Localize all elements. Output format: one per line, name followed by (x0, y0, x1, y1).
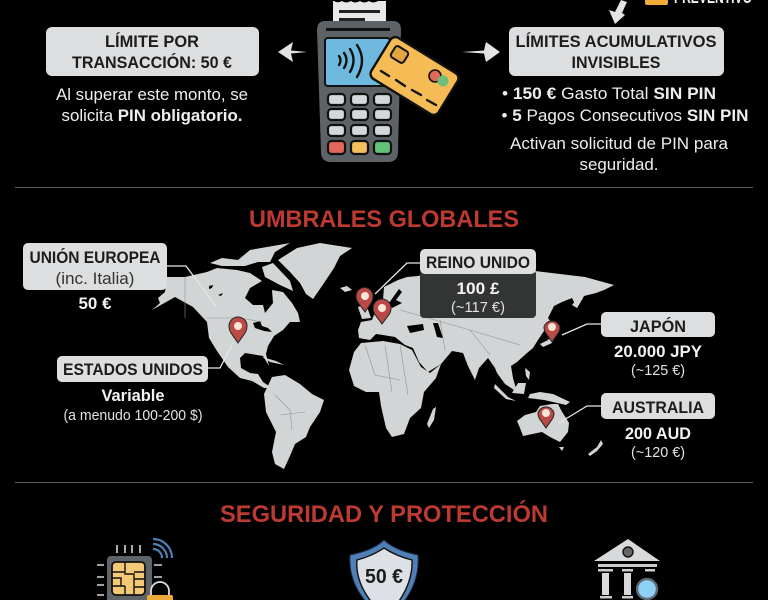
pin: Reino Unido (356, 288, 373, 312)
callout: Australia (601, 393, 715, 461)
callout: Australia: 200 AUD (625, 424, 691, 443)
callout: Reino Unido: 100 £ (456, 279, 500, 298)
panel: transaction limit: solicita PIN obligatorio. (62, 106, 242, 125)
icon: chip with contactless waves and padlock (97, 539, 173, 600)
connector: Estados Unidos (208, 343, 233, 368)
panel: transaction limit: TRANSACCIÓN: 50 € (72, 53, 233, 72)
land: Eurasia (358, 270, 614, 392)
callout: Estados Unidos (57, 356, 208, 424)
callout: Australia: (~120 €) (631, 444, 685, 461)
heading: global thresholds: UMBRALES GLOBALES (249, 206, 519, 233)
pin: Australia (538, 407, 554, 428)
land: Africa (349, 341, 441, 437)
panel: transaction limit: LÍMITE POR (105, 32, 199, 51)
icon: shield with 50 euro (350, 540, 418, 600)
connector: Reino Unido (375, 263, 420, 294)
callout: Estados Unidos: Variable (102, 386, 164, 405)
water: Great Lakes and northern lakes (209, 285, 272, 332)
connector: Unión Europea (167, 266, 216, 306)
panel: cumulative invisible limits: Activan solicitud de PIN para (510, 134, 729, 153)
callout: Reino Unido: (~117 €) (451, 299, 505, 316)
arrow: preventive tag to cumulative limits (609, 0, 627, 24)
land: South America (264, 375, 324, 469)
callout: Reino Unido: REINO UNIDO (426, 253, 530, 272)
pin: Japón (544, 321, 560, 342)
arrow: terminal to transaction limit (278, 42, 307, 62)
land: Great Britain (358, 304, 371, 319)
callout: Australia: AUSTRALIA (612, 398, 704, 417)
callout: Unión Europea: UNIÓN EUROPEA (30, 248, 160, 267)
land: Japan (540, 296, 583, 347)
land: Indonesia and Philippines (494, 368, 570, 405)
land: Cuba and Caribbean (262, 357, 284, 365)
land: Iceland (340, 286, 352, 292)
panel: cumulative invisible limits: • 5 Pagos Consecutivos SIN PIN (502, 106, 748, 125)
icon: payment terminal with card (317, 0, 461, 162)
land: North America (152, 268, 300, 388)
land: Australia (517, 404, 569, 451)
callout: Japón (601, 312, 715, 379)
callout: Japón: JAPÓN (630, 317, 686, 336)
panel: cumulative invisible limits: • 150 € Gasto Total SIN PIN (502, 84, 716, 103)
connector: Japón (562, 324, 601, 335)
water: Baltic, Black and Caspian seas (389, 289, 443, 338)
land: Arctic islands (210, 243, 293, 291)
connector: Australia (559, 406, 601, 423)
panel: cumulative invisible limits: seguridad. (580, 155, 658, 174)
callout: preventive tag, cut off at top (645, 0, 752, 7)
icon: shield with 50 euro: 50 € (365, 566, 403, 588)
land: Greenland (278, 243, 352, 299)
callout: Unión Europea: (inc. Italia) (56, 269, 134, 288)
land: New Zealand (588, 440, 603, 456)
callout: Japón: (~125 €) (631, 362, 685, 379)
arrow: terminal to cumulative limits (462, 42, 500, 62)
heading: security and protection: SEGURIDAD Y PROTECCIÓN (220, 500, 548, 528)
icon: bank with magnifying glass (594, 539, 660, 599)
callout: Reino Unido (420, 249, 536, 318)
callout: Unión Europea (23, 243, 167, 313)
panel: cumulative invisible limits (502, 27, 748, 174)
callout: Estados Unidos: ESTADOS UNIDOS (63, 360, 203, 379)
panel: transaction limit (46, 27, 259, 125)
panel: cumulative invisible limits: INVISIBLES (572, 53, 660, 72)
panel: cumulative invisible limits: LÍMITES ACUMULATIVOS (516, 32, 716, 51)
pin: Europa (373, 299, 391, 324)
pin: Estados Unidos (229, 317, 247, 343)
chart: world map (152, 243, 614, 469)
callout: Estados Unidos: (a menudo 100-200 $) (64, 407, 202, 424)
callout: Unión Europea: 50 € (78, 294, 112, 313)
callout: Japón: 20.000 JPY (614, 342, 703, 361)
land: Madagascar (427, 407, 436, 428)
panel: transaction limit: Al superar este monto, se (56, 85, 248, 104)
